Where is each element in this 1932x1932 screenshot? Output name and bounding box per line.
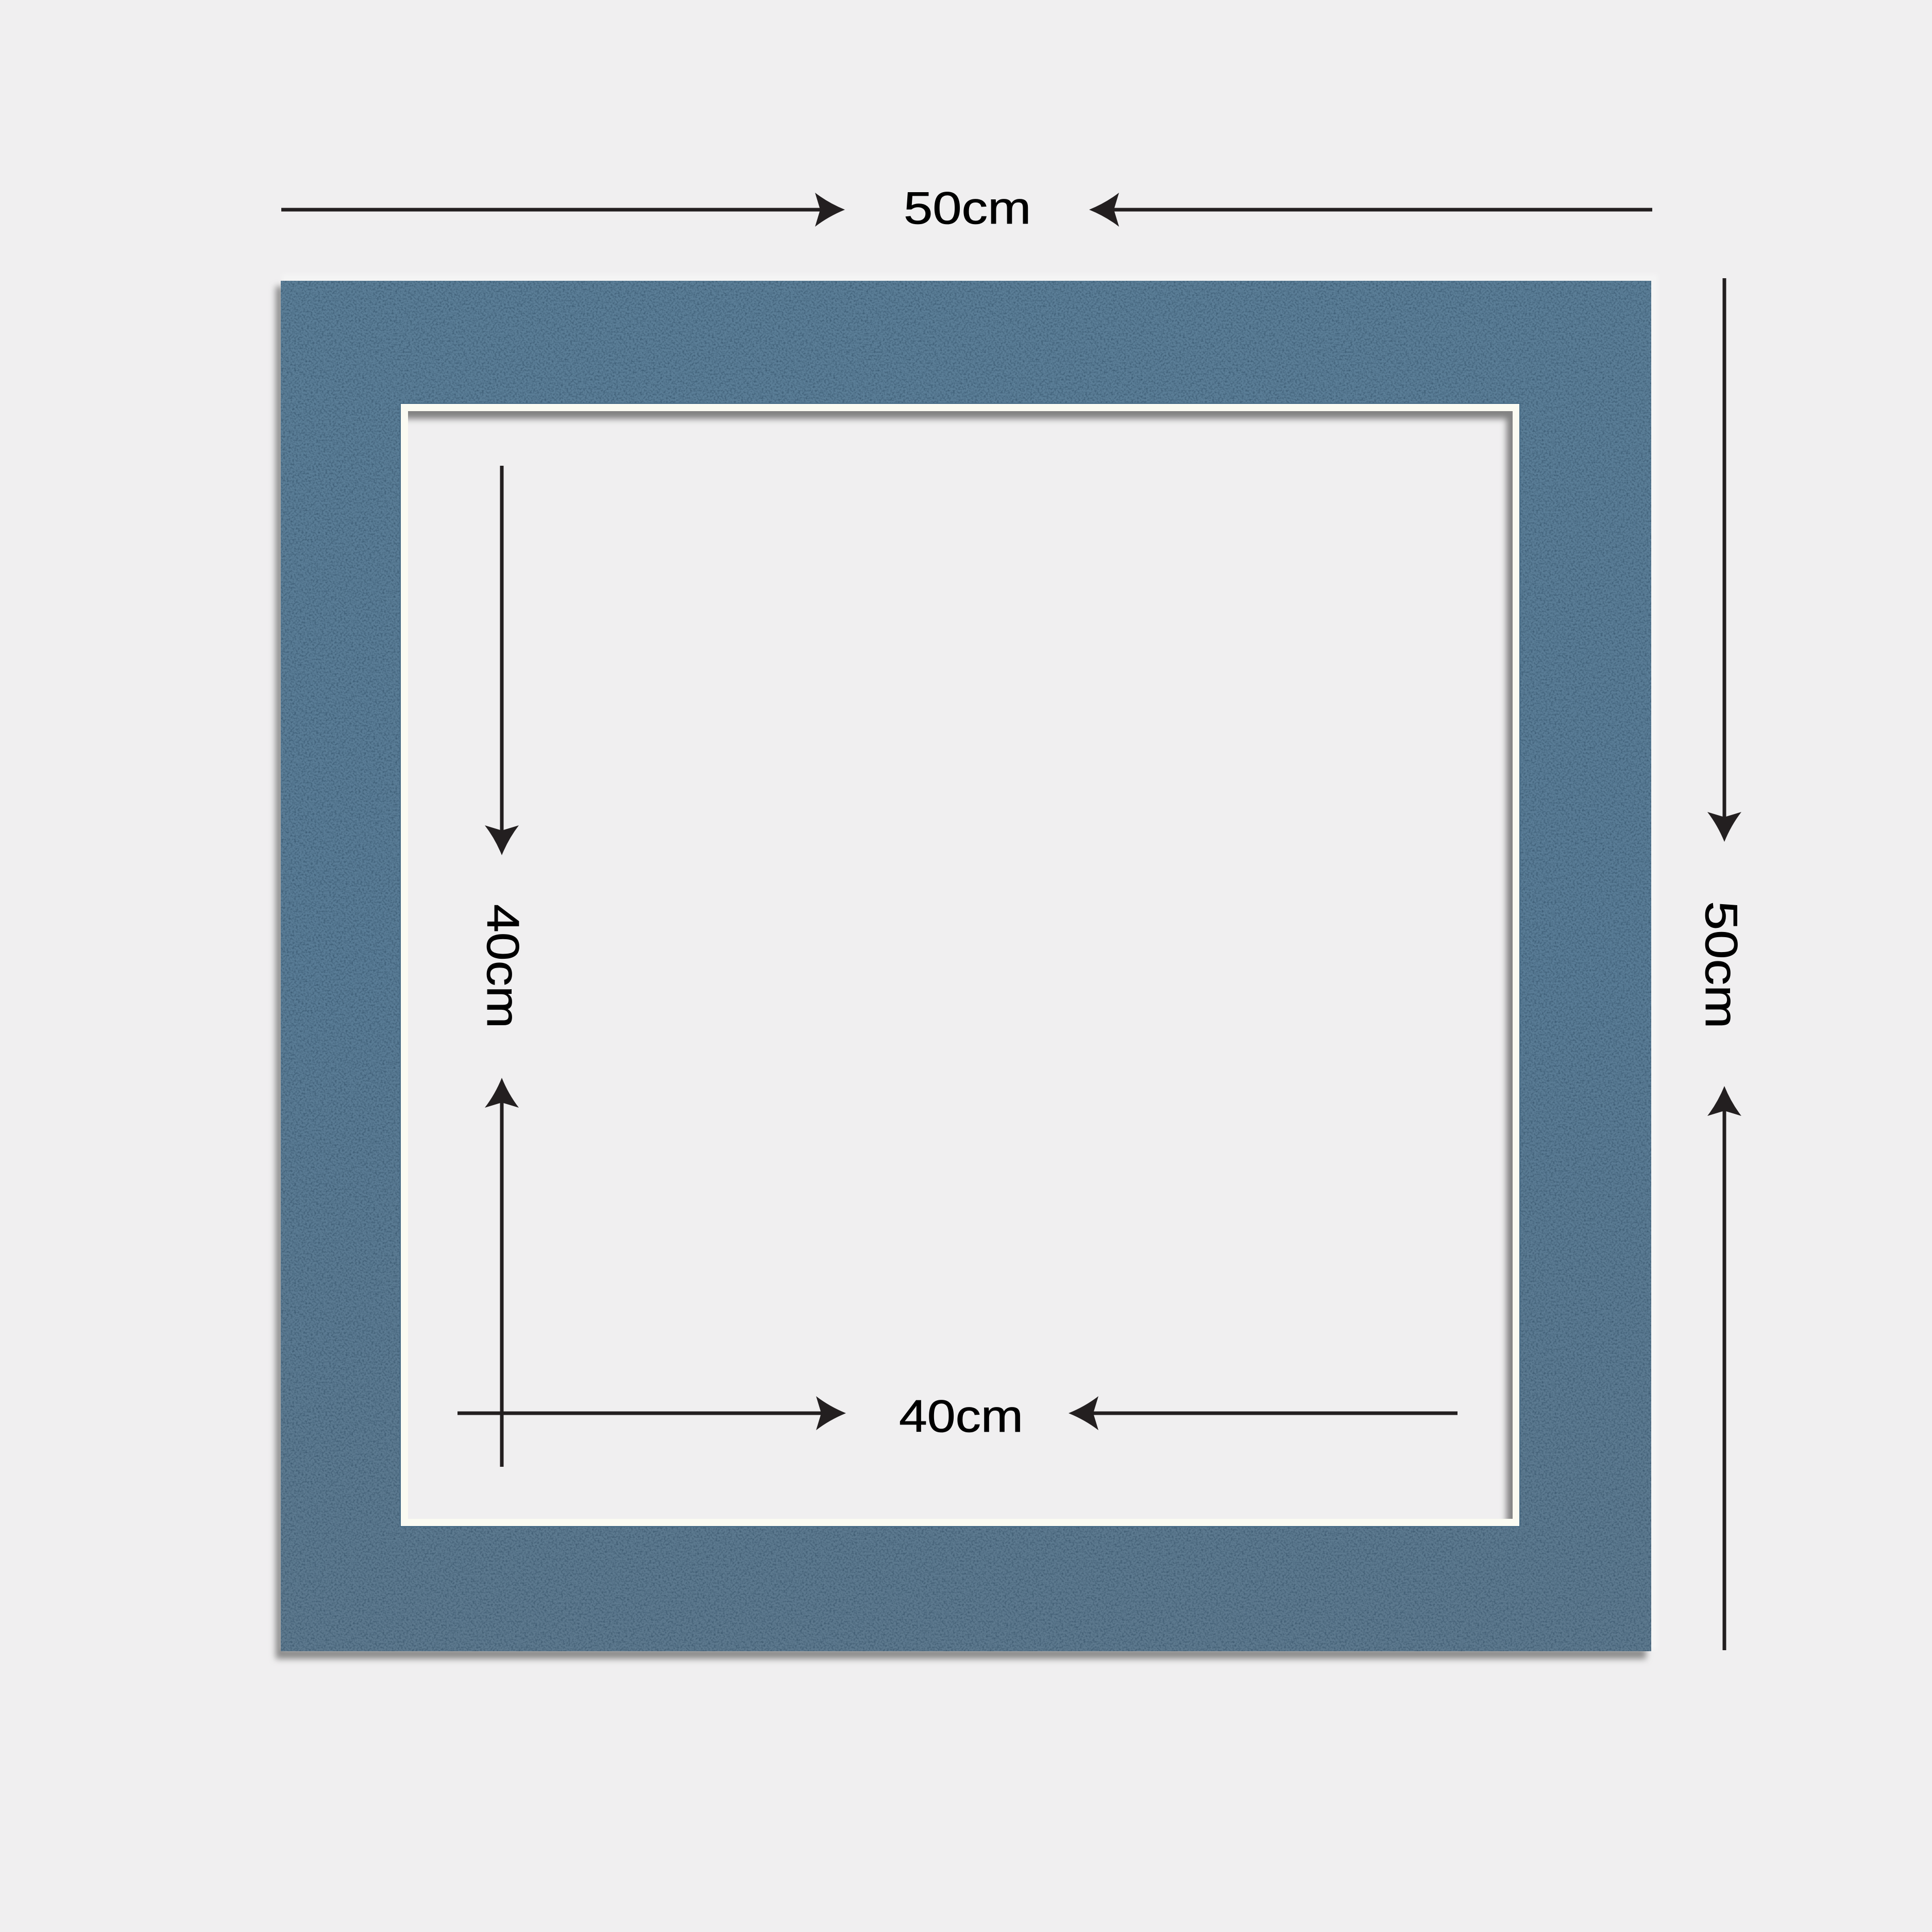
bevel edge line: [400, 403, 1520, 1527]
board outer shadow: [276, 286, 1646, 1659]
arrow: top width, left: [281, 193, 845, 227]
arrow: right height, bottom: [1707, 1086, 1741, 1650]
arrow: right height, top: [1707, 278, 1741, 842]
arrow: inner width, right: [1069, 1396, 1458, 1430]
window inner shadow: [408, 411, 1513, 1519]
label: 40cm bottom: 40cm: [899, 1391, 1023, 1442]
board highlight halo: [282, 274, 1658, 1650]
arrow: inner height, top: [485, 466, 519, 855]
label: 40cm left: 40cm: [478, 904, 529, 1028]
label: 50cm top: 50cm: [904, 183, 1031, 233]
window opening: [401, 404, 1519, 1526]
label: 50cm right: 50cm: [1696, 901, 1747, 1028]
panel: mount board: [272, 281, 1651, 1663]
arrow: top width, right: [1089, 193, 1652, 227]
board paper grain: [281, 281, 1651, 1651]
arrow: inner height, bottom: [485, 1078, 519, 1467]
arrow: inner width, left: [457, 1396, 846, 1430]
blue board surface: [281, 281, 1651, 1651]
window bevel: [401, 404, 1519, 1526]
